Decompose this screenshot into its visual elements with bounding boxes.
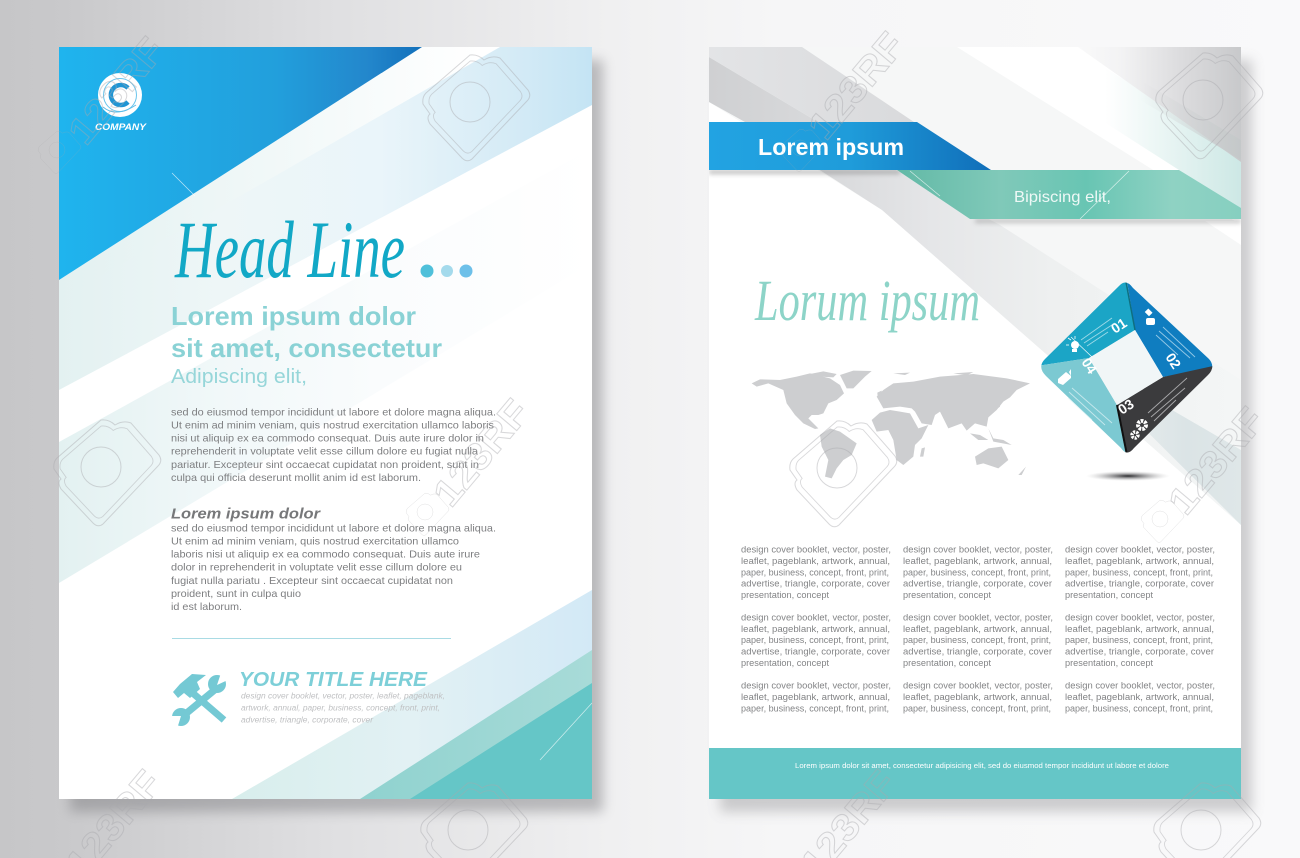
text block: intro paragraph: pariatur. Excepteur sint occaecat cupidatat non proident, sunt in bbox=[171, 459, 479, 471]
column 3 bbox=[1065, 545, 1215, 713]
text columns bbox=[741, 545, 1215, 713]
footer bar bbox=[709, 748, 1241, 799]
blue ribbon shadow bbox=[709, 170, 900, 174]
top right teal strip bbox=[1127, 83, 1241, 208]
column 1: design cover booklet, vector, poster, bbox=[741, 681, 891, 691]
lower right tint bbox=[1149, 410, 1241, 525]
pale wedge under blue bbox=[59, 88, 358, 300]
text block: second paragraph: laboris nisi ut aliquip ex ea commodo consequat. Duis aute irure bbox=[171, 549, 480, 561]
column 3: presentation, concept bbox=[1065, 658, 1154, 668]
callout text: design cover booklet, vector, poster, leaflet, pageblank, bbox=[241, 690, 445, 700]
shadow bbox=[1086, 471, 1170, 481]
column 2: advertise, triangle, corporate, cover bbox=[903, 646, 1052, 656]
column 1: paper, business, concept, front, print, bbox=[741, 567, 889, 577]
subheading bbox=[171, 301, 442, 388]
panel: right page bbox=[709, 47, 1241, 799]
segment 03 bbox=[1117, 366, 1212, 452]
top lighter gray band bbox=[709, 47, 914, 122]
script heading: Lorum ipsum: Lorum ipsum bbox=[754, 268, 980, 333]
infographic: four step diamond bbox=[1041, 282, 1212, 480]
inner square bbox=[1089, 330, 1163, 405]
text block: second paragraph bbox=[171, 522, 496, 613]
subheading: Lorem ipsum dolor bbox=[171, 301, 416, 331]
segment 02 bbox=[1127, 282, 1212, 377]
teal ribbon shadow bbox=[975, 219, 1241, 223]
column 2: paper, business, concept, front, print, bbox=[903, 703, 1051, 713]
text block: second paragraph: sed do eiusmod tempor incididunt ut labore et dolore magna aliqua. bbox=[171, 522, 496, 534]
watermark logo 4 bbox=[1141, 400, 1273, 543]
blue corner triangle bbox=[59, 47, 422, 280]
column 1: leaflet, pageblank, artwork, annual, bbox=[741, 556, 890, 566]
logo: company: COMPANY bbox=[95, 122, 147, 132]
watermark logo 3: 123RF bbox=[426, 392, 538, 515]
text block: intro paragraph: reprehenderit in voluptate velit esse cillum dolore eu fugiat nulla bbox=[171, 446, 478, 458]
title: Head Line: Head Line bbox=[174, 204, 405, 295]
text block: second paragraph: Ut enim ad minim veniam, quis nostrud exercitation ullamco bbox=[171, 536, 459, 548]
text block: intro paragraph: Ut enim ad minim veniam, quis nostrud exercitation ullamco laboris bbox=[171, 420, 494, 432]
top right dark strip bbox=[1167, 110, 1222, 149]
gray diagonal band through the page bbox=[709, 57, 1054, 356]
ribbon title: Lorem ipsum bbox=[758, 134, 904, 160]
watermark camera 3 bbox=[54, 420, 161, 526]
number 03: 03 bbox=[1115, 395, 1137, 418]
watermark logo 1 bbox=[38, 30, 173, 174]
column 1: paper, business, concept, front, print, bbox=[741, 635, 889, 645]
text block: intro paragraph: culpa qui officia deserunt mollit anim id est laborum. bbox=[171, 472, 421, 484]
column 1: leaflet, pageblank, artwork, annual, bbox=[741, 624, 890, 634]
column 1: leaflet, pageblank, artwork, annual, bbox=[741, 692, 890, 702]
pale diagonal band upper bbox=[59, 47, 592, 390]
text block: second paragraph: proident, sunt in culpa quio bbox=[171, 588, 301, 600]
blue ribbon bbox=[709, 122, 991, 170]
column 3: leaflet, pageblank, artwork, annual, bbox=[1065, 692, 1214, 702]
column 2: paper, business, concept, front, print, bbox=[903, 567, 1051, 577]
segment 01 bbox=[1041, 282, 1135, 366]
column 1: design cover booklet, vector, poster, bbox=[741, 612, 891, 622]
pale diagonal band lower bbox=[59, 296, 324, 583]
column 3: presentation, concept bbox=[1065, 590, 1154, 600]
right page shadow bbox=[720, 60, 1252, 812]
watermark logo 2: 123RF bbox=[801, 25, 913, 148]
divider rule bbox=[172, 638, 451, 640]
column 2: design cover booklet, vector, poster, bbox=[903, 612, 1053, 622]
text block: intro paragraph: sed do eiusmod tempor incididunt ut labore et dolore magna aliqua. bbox=[171, 406, 496, 418]
ribbon subtitle: Bipiscing elit, bbox=[1014, 189, 1111, 206]
column 2: design cover booklet, vector, poster, bbox=[903, 681, 1053, 691]
icon: handshake bbox=[1145, 308, 1155, 325]
watermark camera 4 bbox=[790, 421, 897, 527]
column 2 bbox=[903, 545, 1053, 713]
column 3: leaflet, pageblank, artwork, annual, bbox=[1065, 624, 1214, 634]
column 2: design cover booklet, vector, poster, bbox=[903, 545, 1053, 555]
callout text: artwork, annual, paper, business, concept, front, print, bbox=[241, 702, 440, 712]
column 2: advertise, triangle, corporate, cover bbox=[903, 579, 1052, 589]
column 3: design cover booklet, vector, poster, bbox=[1065, 681, 1215, 691]
subheading: sit amet, consectetur bbox=[171, 333, 442, 363]
text block: intro paragraph: nisi ut aliquip ex ea commodo consequat. Duis aute irure dolor in bbox=[171, 433, 484, 445]
panel: left page bbox=[59, 47, 592, 799]
column 2: leaflet, pageblank, artwork, annual, bbox=[903, 624, 1052, 634]
subheading: Lorem ipsum dolor: Lorem ipsum dolor bbox=[171, 506, 321, 522]
column 1: presentation, concept bbox=[741, 590, 830, 600]
text block: second paragraph: dolor in reprehenderit in voluptate velit esse cillum dolore eu bbox=[171, 562, 462, 574]
callout text bbox=[241, 690, 445, 724]
icon: folder bbox=[1058, 369, 1071, 385]
tiny text lines 04 bbox=[1068, 388, 1112, 425]
callout title: YOUR TITLE HERE bbox=[239, 669, 428, 691]
teal ribbon bbox=[897, 170, 1241, 219]
icon: hammer and wrench bbox=[170, 670, 230, 729]
icon: gears bbox=[1132, 421, 1146, 438]
watermark logo 3 bbox=[406, 392, 538, 536]
column 1: paper, business, concept, front, print, bbox=[741, 703, 889, 713]
column 1: design cover booklet, vector, poster, bbox=[741, 545, 891, 555]
column 1: advertise, triangle, corporate, cover bbox=[741, 579, 890, 589]
segment 04 bbox=[1041, 358, 1126, 452]
watermark logo 4: 123RF bbox=[1161, 400, 1273, 523]
text block: second paragraph: fugiat nulla pariatu . Excepteur sint occaecat cupidatat non bbox=[171, 575, 453, 587]
column 1: presentation, concept bbox=[741, 658, 830, 668]
column 2: paper, business, concept, front, print, bbox=[903, 635, 1051, 645]
tiny text lines 02 bbox=[1156, 327, 1195, 358]
number 02: 02 bbox=[1162, 350, 1185, 372]
watermark camera 6 bbox=[1154, 783, 1261, 858]
small white wedge bbox=[1212, 224, 1241, 244]
column 3: paper, business, concept, front, print, bbox=[1065, 635, 1213, 645]
watermark camera 1 bbox=[423, 55, 530, 161]
watermark logo 2 bbox=[781, 25, 913, 172]
number 04: 04 bbox=[1078, 355, 1101, 377]
decorative dots bbox=[420, 264, 472, 278]
footer text: Lorem ipsum dolor sit amet, consectetur adipisicing elit, sed do eiusmod tempor incididunt ut labore et dolore bbox=[795, 761, 1169, 770]
medium teal bottom wedge bbox=[360, 650, 592, 799]
column 2: presentation, concept bbox=[903, 658, 992, 668]
column 1 bbox=[741, 545, 891, 713]
number 01: 01 bbox=[1108, 314, 1130, 337]
world map bbox=[752, 371, 1030, 478]
top right gray corner bbox=[1094, 47, 1241, 162]
pale bottom wedge bbox=[232, 590, 592, 799]
column 2: leaflet, pageblank, artwork, annual, bbox=[903, 556, 1052, 566]
subheading: Adipiscing elit, bbox=[171, 366, 307, 388]
dark teal bottom wedge bbox=[410, 683, 592, 799]
icon: lightbulb bbox=[1066, 336, 1079, 352]
column 1: advertise, triangle, corporate, cover bbox=[741, 646, 890, 656]
tiny text lines 01 bbox=[1081, 318, 1115, 346]
column 2: presentation, concept bbox=[903, 590, 992, 600]
column 3: advertise, triangle, corporate, cover bbox=[1065, 646, 1214, 656]
column 3: paper, business, concept, front, print, bbox=[1065, 567, 1213, 577]
watermark logo 1: 123RF bbox=[61, 30, 173, 153]
light gray diagonal band bbox=[718, 47, 1241, 380]
column 3: design cover booklet, vector, poster, bbox=[1065, 545, 1215, 555]
left page shadow bbox=[70, 60, 603, 812]
watermark camera 5 bbox=[421, 783, 528, 858]
text block: second paragraph: id est laborum. bbox=[171, 601, 242, 613]
column 2: leaflet, pageblank, artwork, annual, bbox=[903, 692, 1052, 702]
segments bbox=[1041, 282, 1212, 452]
column 3: design cover booklet, vector, poster, bbox=[1065, 612, 1215, 622]
callout text: advertise, triangle, corporate, cover bbox=[241, 714, 374, 724]
watermark camera 2 bbox=[1156, 53, 1263, 159]
text block: intro paragraph bbox=[171, 406, 496, 484]
column 3: advertise, triangle, corporate, cover bbox=[1065, 579, 1214, 589]
column 3: paper, business, concept, front, print, bbox=[1065, 703, 1213, 713]
column 3: leaflet, pageblank, artwork, annual, bbox=[1065, 556, 1214, 566]
tiny text lines 03 bbox=[1148, 378, 1187, 421]
logo: company bbox=[95, 73, 147, 132]
